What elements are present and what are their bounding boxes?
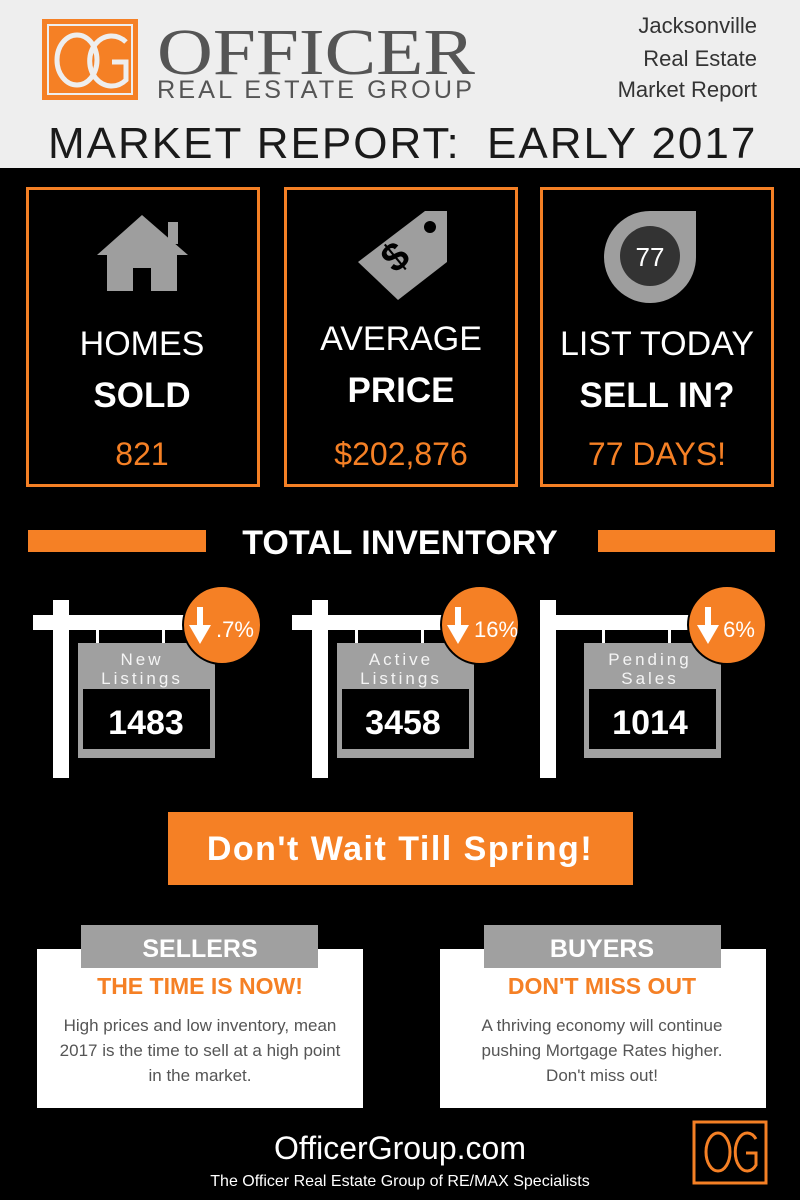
title bbox=[48, 119, 757, 168]
heading: total inventory bbox=[28, 524, 775, 562]
panel: homes sold: HOMES bbox=[80, 325, 204, 363]
panel: list today sell in: SELL IN? bbox=[580, 376, 734, 415]
subtitle: Jacksonville: Jacksonville bbox=[638, 13, 757, 38]
panel: average price: AVERAGE bbox=[320, 320, 482, 358]
header panel bbox=[0, 0, 800, 168]
panel: buyers: Don't miss out! bbox=[546, 1066, 658, 1085]
panel: homes sold: SOLD bbox=[93, 376, 191, 415]
panel: average price: $202,876 bbox=[334, 436, 468, 472]
badge: down 16%: 16% bbox=[474, 617, 518, 642]
icon: OG logo bbox=[42, 19, 138, 100]
panel: homes sold: 821 bbox=[115, 436, 169, 472]
panel: sellers: in the market. bbox=[148, 1066, 252, 1085]
sign: active listings: Active bbox=[369, 650, 433, 669]
logo wordmark: OFFICER bbox=[157, 16, 475, 89]
icon: house bbox=[97, 215, 188, 291]
panel: sellers: High prices and low inventory, mean bbox=[64, 1016, 336, 1035]
panel: buyers: BUYERS bbox=[550, 935, 654, 963]
sign: pending sales: Sales bbox=[621, 669, 679, 688]
panel: buyers: A thriving economy will continue bbox=[482, 1016, 722, 1035]
icon: price tag: $ bbox=[373, 233, 418, 281]
footer text: The Officer Real Estate Group of RE/MAX Specialists bbox=[210, 1173, 590, 1190]
panel: list today sell in: LIST TODAY bbox=[560, 325, 754, 363]
sign: active listings bbox=[292, 586, 519, 778]
badge: down .7%: .7% bbox=[216, 617, 254, 642]
panel: list today sell in: 77 DAYS! bbox=[588, 436, 726, 472]
subtitle: Jacksonville: Real Estate bbox=[643, 46, 757, 71]
panel: average price bbox=[286, 188, 516, 486]
panel: buyers: pushing Mortgage Rates higher. bbox=[482, 1041, 722, 1060]
footer text: OfficerGroup.com bbox=[274, 1130, 526, 1166]
sign: active listings: 3458 bbox=[365, 704, 441, 742]
panel: average price: PRICE bbox=[348, 371, 454, 410]
sign: pending sales: Pending bbox=[608, 650, 692, 669]
badge: down 6% bbox=[688, 586, 766, 664]
badge: down 16% bbox=[441, 586, 519, 664]
panel: sellers bbox=[37, 925, 363, 1108]
subtitle: Jacksonville bbox=[618, 13, 757, 102]
panel: sellers: THE TIME IS NOW! bbox=[97, 973, 303, 999]
badge: down 6%: 6% bbox=[723, 617, 755, 642]
callout: don't wait till spring: Don't Wait Till Spring! bbox=[207, 830, 593, 868]
icon: days dial: 77 bbox=[636, 242, 664, 272]
footer text bbox=[210, 1130, 590, 1190]
heading: total inventory: TOTAL INVENTORY bbox=[242, 524, 558, 562]
icon: price tag bbox=[358, 211, 447, 300]
panel: buyers: DON'T MISS OUT bbox=[508, 973, 696, 999]
subtitle: Jacksonville: Market Report bbox=[618, 77, 757, 102]
sign: pending sales: 1014 bbox=[612, 704, 688, 742]
sign: new listings: New bbox=[120, 650, 164, 669]
sign: new listings bbox=[33, 586, 261, 778]
panel: homes sold bbox=[28, 188, 258, 486]
title: EARLY 2017 bbox=[487, 119, 757, 168]
icon: footer OG logo bbox=[694, 1122, 766, 1183]
sign: pending sales bbox=[540, 586, 766, 778]
callout: don't wait till spring bbox=[168, 812, 633, 885]
panel: list today sell in bbox=[542, 188, 772, 486]
title: MARKET REPORT: bbox=[48, 119, 461, 168]
icon: days dial bbox=[604, 211, 696, 303]
panel: buyers bbox=[440, 925, 766, 1108]
logo wordmark: REAL ESTATE GROUP bbox=[157, 76, 475, 104]
panel: sellers: 2017 is the time to sell at a high point bbox=[60, 1041, 341, 1060]
badge: down .7% bbox=[183, 586, 261, 664]
sign: active listings: Listings bbox=[360, 669, 442, 688]
sign: new listings: Listings bbox=[101, 669, 183, 688]
sign: new listings: 1483 bbox=[108, 704, 184, 742]
panel: sellers: SELLERS bbox=[142, 935, 258, 963]
